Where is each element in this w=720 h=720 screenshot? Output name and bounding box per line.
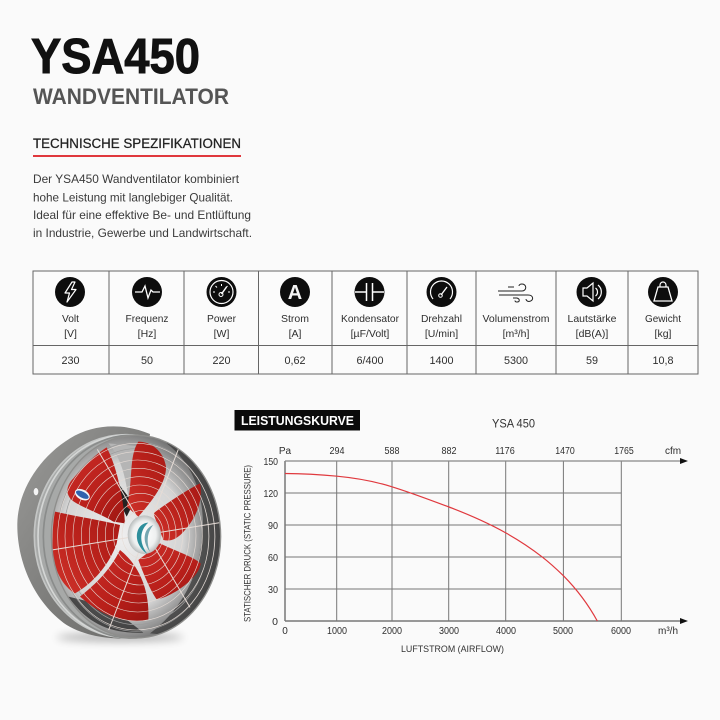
description text (33, 172, 252, 240)
spec: kondensator: 6/400 (356, 355, 384, 367)
y axis labels: 90 (268, 520, 278, 532)
y axis labels: 120 (264, 488, 278, 500)
grille rim (51, 435, 221, 638)
motor shadow (117, 482, 133, 517)
spec: lautstaerke (568, 277, 617, 367)
spec: volumenstrom (482, 284, 550, 367)
spec: strom: [A] (289, 328, 301, 340)
section heading: technische spezifikationen: TECHNISCHE SPEZIFIKATIONEN (33, 135, 241, 151)
spec: gewicht: [kg] (655, 328, 672, 340)
bottom axis labels: 1000 (327, 626, 347, 637)
spec: volumenstrom: Volumenstrom (482, 313, 550, 325)
heading: leistungskurve: LEISTUNGSKURVE (241, 413, 354, 428)
top axis labels: 882 (442, 446, 457, 457)
spec: lautstaerke: [dB(A)] (576, 328, 608, 340)
hub (128, 515, 161, 554)
spec: frequenz (126, 277, 168, 367)
dark interior shading (57, 440, 223, 640)
spec: volt: Volt (62, 313, 79, 325)
spec: frequenz: Frequenz (126, 313, 168, 325)
description text: in Industrie, Gewerbe und Landwirtschaft. (33, 226, 252, 240)
spec: power: [W] (214, 328, 229, 340)
spec: lautstaerke: Lautstärke (568, 313, 617, 325)
y axis labels: 0 (272, 616, 278, 628)
top axis labels: 588 (384, 446, 400, 457)
spec: kondensator: [µF/Volt] (351, 328, 389, 340)
top axis arrow (285, 458, 688, 464)
blades (53, 442, 201, 621)
spec: power: Power (207, 313, 236, 325)
spec: volt: 230 (61, 355, 80, 367)
wire guard (52, 443, 220, 630)
spec: gewicht: 10,8 (652, 355, 674, 367)
spec: strom: Strom (281, 313, 309, 325)
spec: gewicht: Gewicht (645, 313, 681, 325)
brand badge (73, 486, 92, 503)
top axis labels (279, 446, 681, 457)
spec: gewicht (645, 277, 681, 367)
description text: hohe Leistung mit langlebiger Qualität. (33, 190, 233, 204)
spec: volt: [V] (64, 328, 77, 340)
spec: power: 220 (212, 355, 231, 367)
spec: strom (280, 277, 310, 367)
spec: frequenz: 50 (141, 355, 153, 367)
spec: drehzahl: [U/min] (425, 328, 458, 340)
fan photo (17, 426, 223, 641)
spec: volumenstrom: 5300 (504, 355, 528, 367)
spec: drehzahl: Drehzahl (421, 313, 462, 325)
floor shadow (57, 633, 183, 641)
spec: kondensator (341, 277, 399, 367)
spec: drehzahl: 1400 (429, 355, 454, 367)
subtitle: WANDVENTILATOR (33, 84, 229, 109)
y axis labels: 30 (268, 584, 278, 596)
red performance curve (285, 474, 597, 621)
y axis labels (264, 456, 278, 628)
y axis labels: 60 (268, 552, 278, 564)
spec: lautstaerke: 59 (586, 355, 598, 367)
description text: Der YSA450 Wandventilator kombiniert (33, 172, 240, 186)
fan opening (51, 435, 221, 638)
bottom axis labels: 2000 (382, 626, 402, 637)
bottom axis labels: m³/h (658, 626, 678, 637)
specifications table (33, 271, 698, 374)
spec: volumenstrom: [m³/h] (503, 328, 529, 340)
top axis labels: cfm (665, 446, 681, 457)
title: YSA450 (31, 30, 200, 84)
performance curve chart (242, 446, 688, 655)
spec: power (206, 277, 236, 367)
bottom axis labels: 5000 (553, 626, 573, 637)
top axis labels: 1176 (495, 446, 515, 457)
top axis labels: 294 (330, 446, 345, 457)
bottom axis labels: 6000 (611, 626, 631, 637)
top axis labels: 1765 (614, 446, 634, 457)
fan housing (17, 426, 150, 638)
mounting hole (34, 488, 38, 495)
spec: volt (55, 277, 85, 367)
bottom axis arrow (285, 618, 688, 624)
spec: kondensator: Kondensator (341, 313, 399, 325)
bottom axis labels (282, 626, 678, 637)
chart title: YSA 450 (492, 416, 535, 430)
top axis labels: 1470 (555, 446, 575, 457)
x axis title: LUFTSTROM (AIRFLOW) (401, 644, 504, 655)
spec: frequenz: [Hz] (138, 328, 156, 340)
y axis labels: 150 (264, 456, 278, 468)
heading: leistungskurve (234, 410, 360, 430)
bottom axis labels: 0 (282, 626, 288, 637)
y axis title: STATISCHER DRUCK (STATIC PRESSURE) (242, 465, 254, 622)
description text: Ideal für eine effektive Be- und Entlüftung (33, 208, 251, 222)
spec: strom: A (288, 282, 302, 304)
spec: drehzahl (421, 277, 462, 367)
silver ribbed ring (34, 434, 221, 638)
top axis labels: Pa (279, 446, 292, 457)
bottom axis labels: 4000 (496, 626, 516, 637)
bottom axis labels: 3000 (439, 626, 459, 637)
spec: strom: 0,62 (284, 355, 306, 367)
